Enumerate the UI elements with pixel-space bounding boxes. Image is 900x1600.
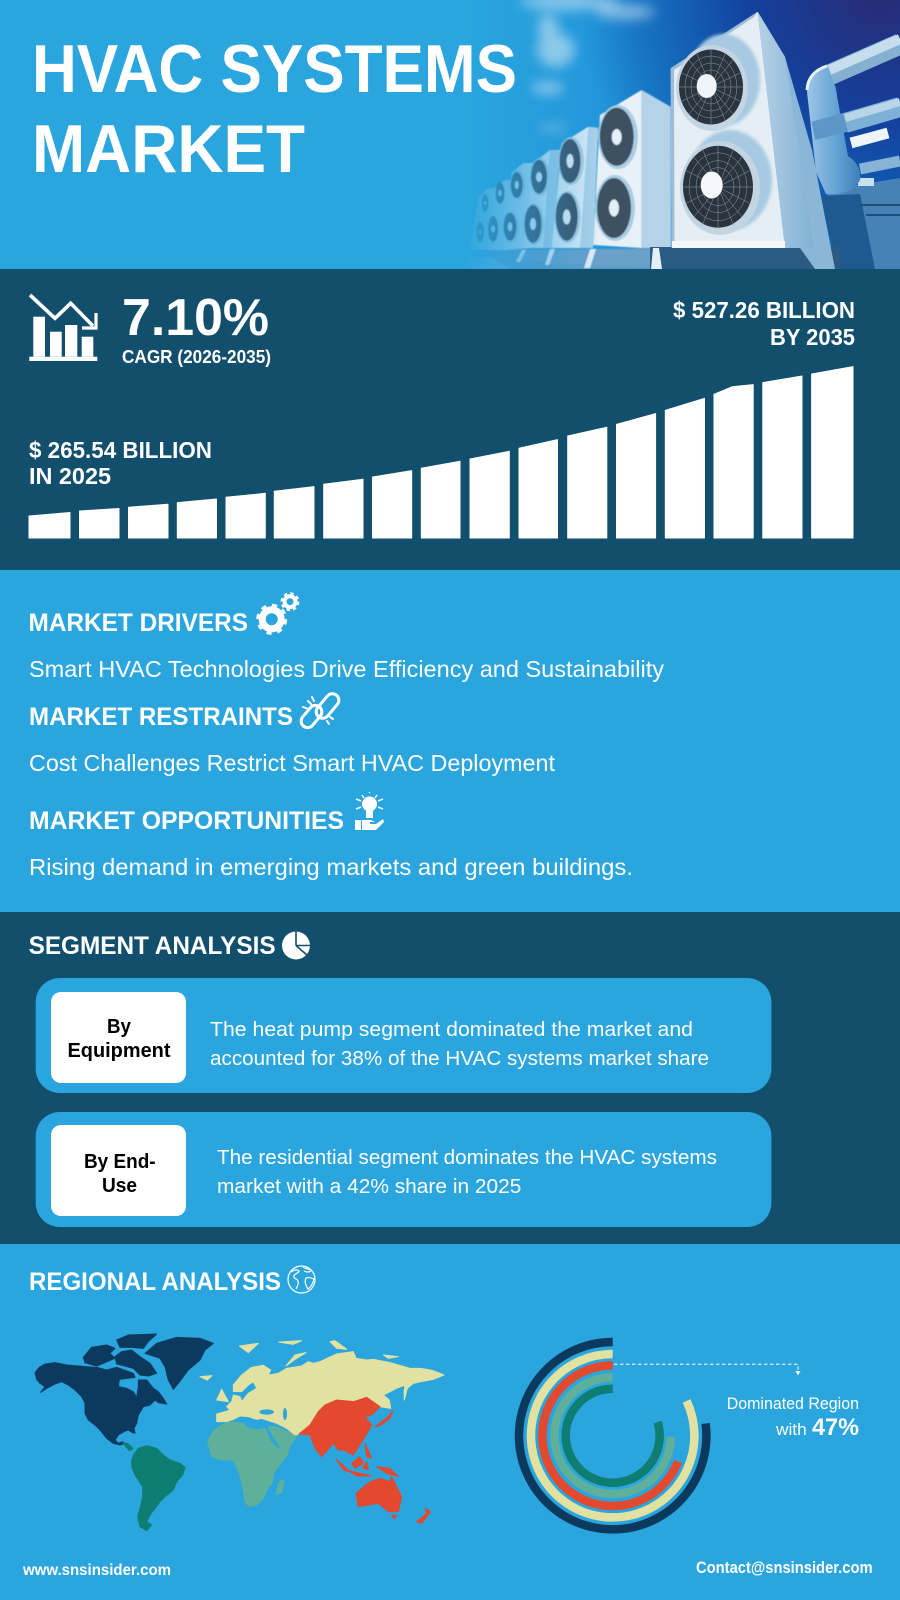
base value 2025: IN 2025	[29, 463, 111, 489]
panel: market size forecast	[0, 269, 900, 570]
fan hubs	[478, 129, 622, 234]
text: equipment finding: The heat pump segment dominated the market and	[210, 1018, 693, 1041]
text: opportunity: Rising demand in emerging markets and green buildings.	[29, 854, 633, 880]
CAGR value: 7.10%	[122, 289, 269, 347]
radial bar chart	[519, 1342, 706, 1529]
icon: hand with light bulb	[355, 792, 384, 830]
North America	[35, 1334, 213, 1445]
base value 2025: $ 265.54 BILLION	[29, 437, 212, 463]
fan shadow	[688, 34, 772, 230]
icon: globe	[288, 1266, 315, 1293]
text: end-use finding: The residential segment dominates the HVAC systems	[217, 1146, 717, 1169]
South America	[123, 1443, 185, 1531]
icon: chart with declining arrow	[29, 295, 97, 361]
title: HVAC SYSTEMS	[32, 31, 517, 107]
fan rims	[503, 105, 638, 245]
CAGR label: CAGR (2026-2035)	[122, 347, 271, 367]
inland seas	[259, 1408, 287, 1420]
heading: segment analysis: SEGMENT ANALYSIS	[29, 932, 276, 960]
pipework and machinery	[807, 39, 900, 269]
units	[471, 188, 495, 250]
title	[32, 31, 517, 187]
heading: market restraints: MARKET RESTRAINTS	[29, 703, 293, 731]
callout: dominated region: 47%	[812, 1414, 859, 1441]
card: by equipment	[36, 978, 771, 1093]
forecast value 2035: $ 527.26 BILLION	[673, 297, 855, 323]
floor	[476, 256, 510, 269]
Europe and North Asia	[200, 1341, 444, 1435]
heading: market opportunities: MARKET OPPORTUNITIES	[29, 807, 344, 835]
label box: by end-use: By End-	[84, 1151, 156, 1173]
label box: by end-use: Use	[102, 1175, 137, 1197]
Asia Pacific	[299, 1397, 431, 1523]
callout: dominated region	[727, 1395, 859, 1441]
label box: by equipment	[51, 992, 186, 1083]
label box: by end-use	[51, 1125, 186, 1216]
callout: dominated region: Dominated Region	[727, 1395, 859, 1413]
icon: pie chart	[282, 931, 311, 960]
text: equipment finding: accounted for 38% of the HVAC systems market share	[210, 1047, 709, 1070]
label box: by equipment: By	[107, 1016, 132, 1038]
panel: market dynamics	[28, 594, 664, 880]
heading: market drivers: MARKET DRIVERS	[28, 609, 248, 637]
stands	[554, 250, 650, 266]
lower fan	[680, 141, 760, 235]
footer: website: www.snsinsider.com	[22, 1562, 171, 1579]
panel: segment analysis	[0, 912, 900, 1244]
base value 2025	[29, 437, 212, 489]
Africa and Middle East	[208, 1422, 298, 1507]
panel: regional analysis	[29, 1266, 859, 1531]
forecast value 2035: BY 2035	[770, 324, 855, 350]
callout: dominated region: with	[775, 1421, 807, 1439]
text: end-use finding: market with a 42% share in 2025	[217, 1175, 521, 1198]
fan grilles	[476, 108, 634, 243]
world map	[35, 1334, 444, 1531]
text: restraint: Cost Challenges Restrict Smart HVAC Deployment	[29, 750, 555, 776]
footer: contact: Contact@snsinsider.com	[696, 1559, 873, 1577]
label box: by equipment: Equipment	[68, 1040, 171, 1062]
leader line to callout	[614, 1364, 800, 1376]
icon: gears	[258, 594, 298, 633]
title: MARKET	[32, 111, 305, 187]
bar chart: market growth	[29, 367, 853, 538]
icon: broken chain	[298, 691, 341, 730]
text: driver: Smart HVAC Technologies Drive Efficiency and Sustainability	[29, 656, 664, 682]
main unit	[650, 12, 840, 269]
forecast value 2035	[673, 297, 855, 350]
upper fan	[676, 45, 748, 131]
text: end-use finding	[217, 1146, 717, 1198]
text: equipment finding	[210, 1018, 709, 1070]
card: by end-use	[36, 1112, 771, 1227]
header photo: rooftop HVAC units	[460, 0, 900, 269]
heading: regional analysis: REGIONAL ANALYSIS	[29, 1268, 281, 1296]
